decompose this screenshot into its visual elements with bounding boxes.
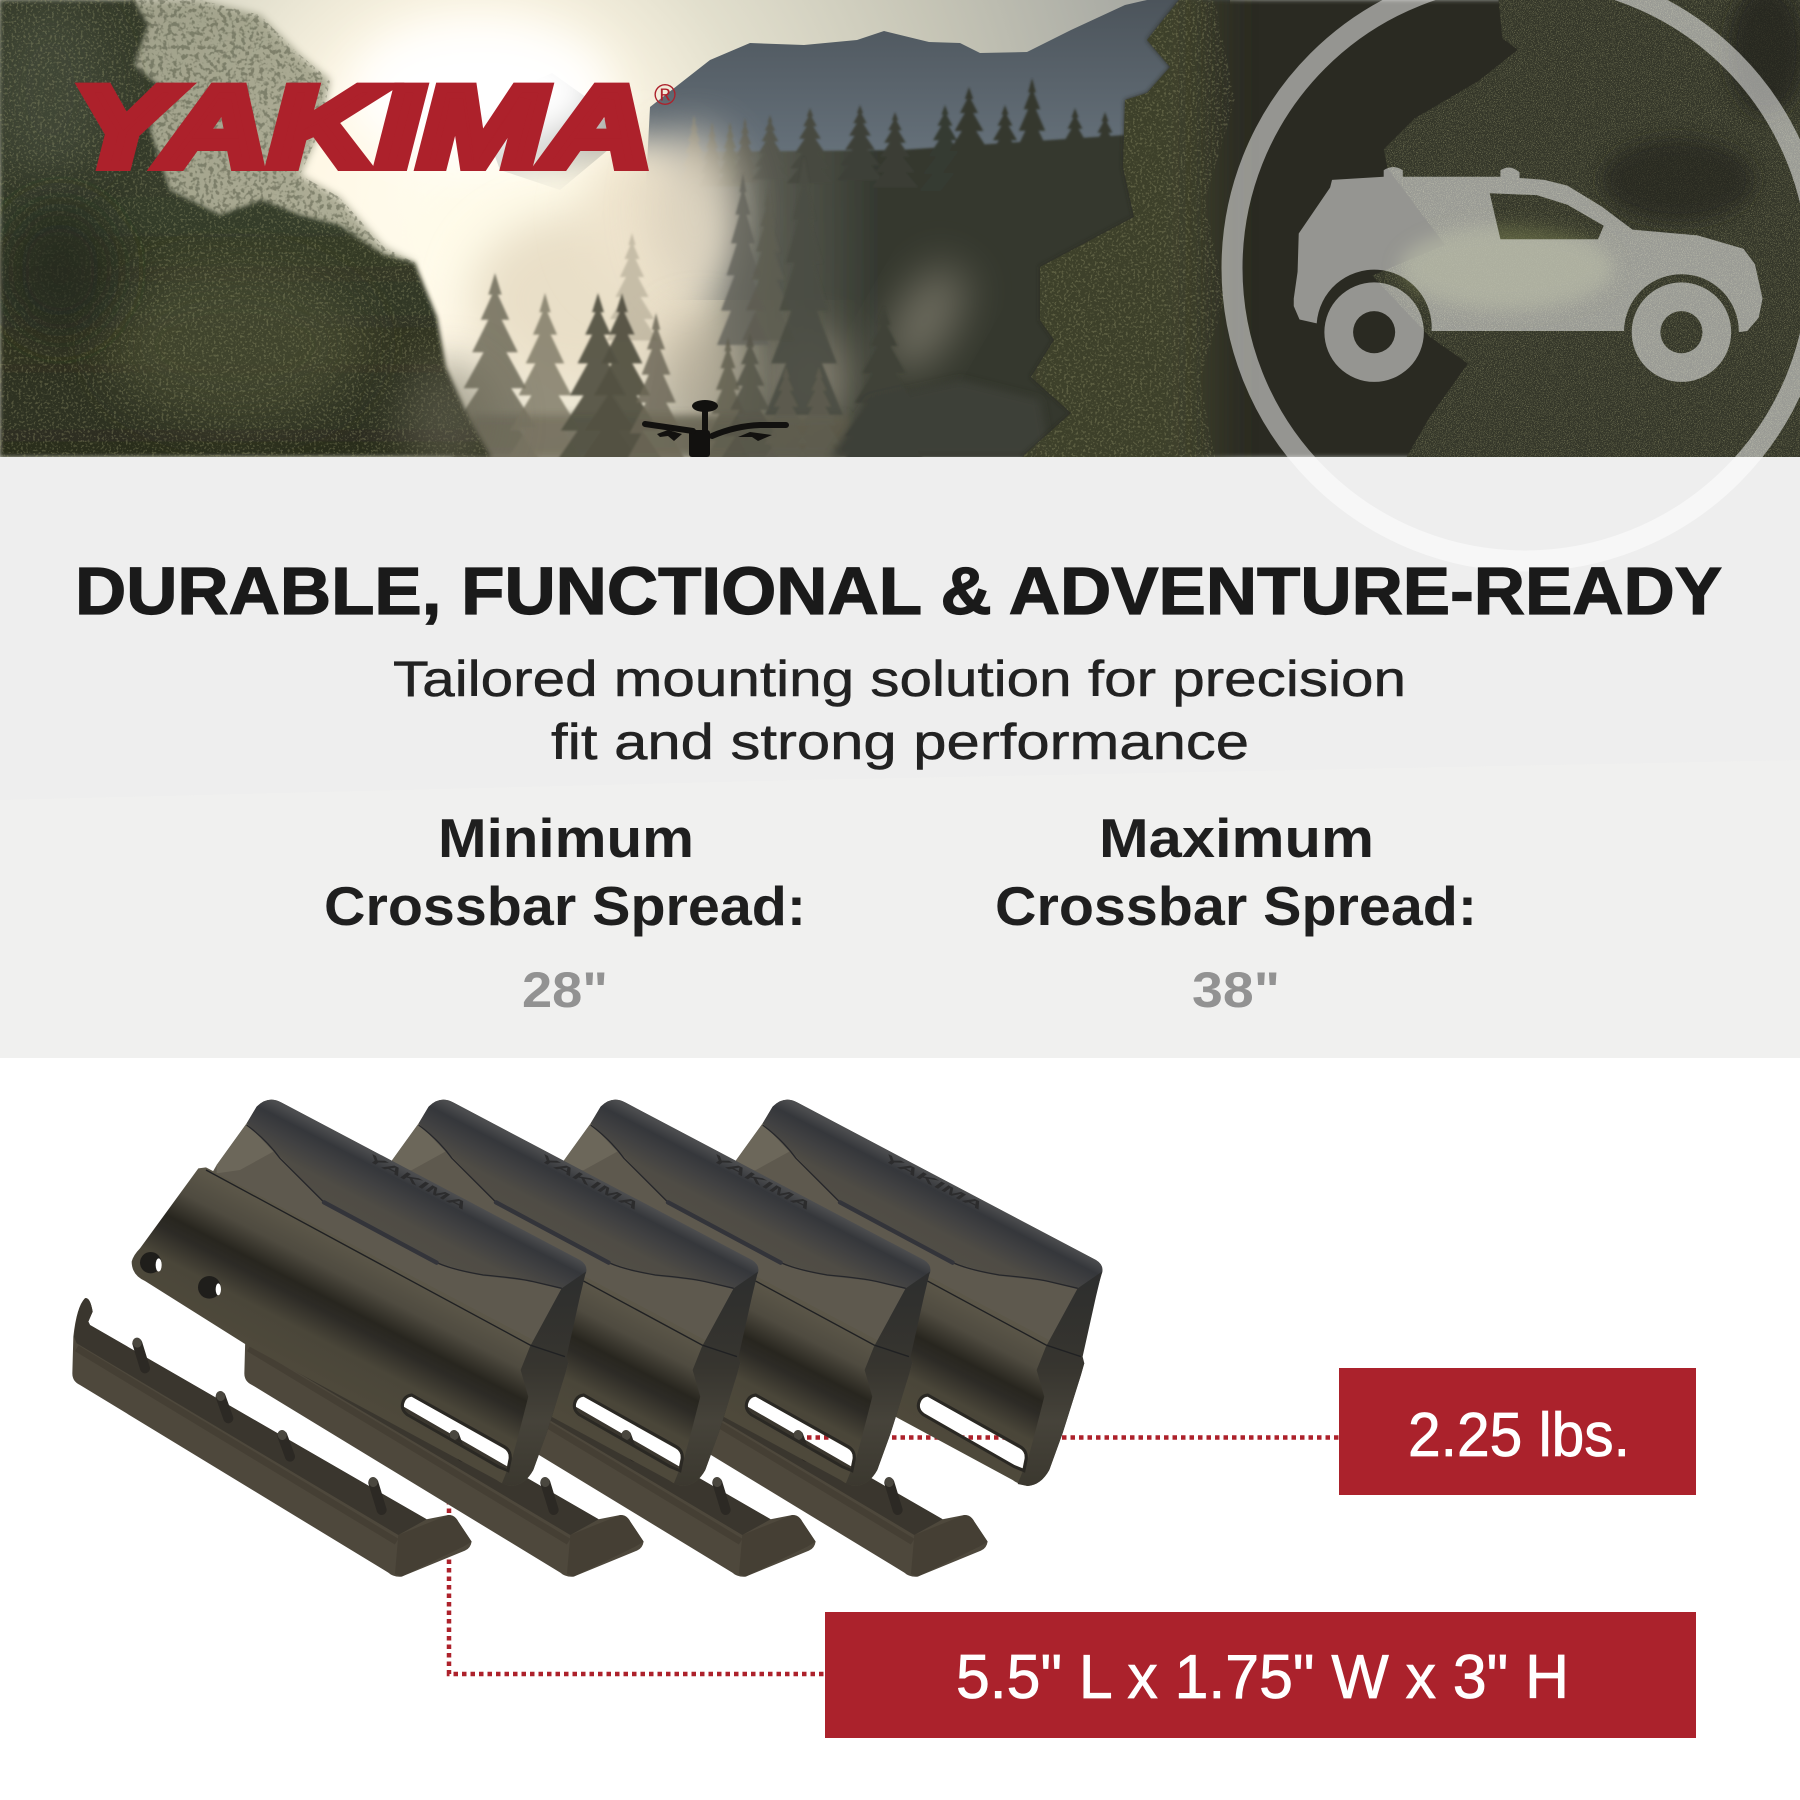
panel: forest photo banner	[0, 0, 1800, 500]
forest ridge and treetops	[640, 78, 1180, 457]
spec: minimum crossbar spread: Crossbar Spread:	[324, 875, 806, 937]
unit 4 clip	[648, 1100, 1102, 1486]
unit 2 strip	[244, 1298, 644, 1577]
subtitle: Tailored mounting solution for precision	[393, 651, 1406, 707]
title: DURABLE, FUNCTIONAL & ADVENTURE-READY	[75, 554, 1722, 629]
callout: weight	[1339, 1368, 1696, 1495]
spec: minimum crossbar spread: Minimum	[438, 807, 694, 869]
spec: minimum crossbar spread: 28"	[522, 962, 608, 1018]
unit 4 clip: YAKIMA	[881, 1152, 984, 1213]
unit 1 clip: YAKIMA	[365, 1152, 468, 1213]
ring	[1232, 0, 1800, 561]
dotted leader: dimensions	[449, 1500, 825, 1674]
vehicle silhouette	[1294, 167, 1763, 382]
subtitle	[393, 651, 1406, 770]
icon: vehicle in ring	[1232, 0, 1800, 561]
spec: maximum crossbar spread	[995, 807, 1477, 1018]
left tree mass	[0, 0, 500, 480]
unit 1 strip	[72, 1298, 472, 1577]
unit 3 clip	[476, 1100, 930, 1486]
callout: weight: 2.25 lbs.	[1408, 1401, 1630, 1470]
left tree canopy, translucent	[120, 0, 415, 300]
spec: maximum crossbar spread: Maximum	[1099, 807, 1374, 869]
registered mark: ®	[654, 79, 676, 112]
distant peak	[480, 73, 620, 190]
panel: misty grey text background	[0, 457, 1800, 1058]
spec: maximum crossbar spread: 38"	[1192, 962, 1280, 1018]
unit 4 strip	[588, 1298, 988, 1577]
unit 2 clip: YAKIMA	[537, 1152, 640, 1213]
fog	[350, 20, 979, 430]
unit 1 clip	[132, 1100, 586, 1486]
spec: minimum crossbar spread	[324, 807, 806, 1018]
logo: YAKIMA wordmark: YAKIMA	[72, 64, 652, 191]
subtitle: fit and strong performance	[551, 714, 1249, 770]
unit 3 strip	[416, 1298, 816, 1577]
bike handlebars silhouette	[645, 400, 786, 457]
spec: maximum crossbar spread: Crossbar Spread:	[995, 875, 1477, 937]
right tree mass	[1022, 0, 1800, 457]
unit 3 clip: YAKIMA	[709, 1152, 812, 1213]
dotted leader: weight	[807, 1435, 1339, 1440]
unit 2 clip	[304, 1100, 758, 1486]
lit foliage	[1372, 0, 1800, 457]
product: four mounting clips with strips	[72, 1100, 1339, 1577]
callout: dimensions: 5.5" L x 1.75" W x 3" H	[956, 1643, 1569, 1712]
mountain range	[640, 0, 1230, 300]
sky with sun glow	[0, 0, 1800, 457]
callout: dimensions	[825, 1612, 1696, 1738]
misty conifers	[446, 157, 1050, 468]
